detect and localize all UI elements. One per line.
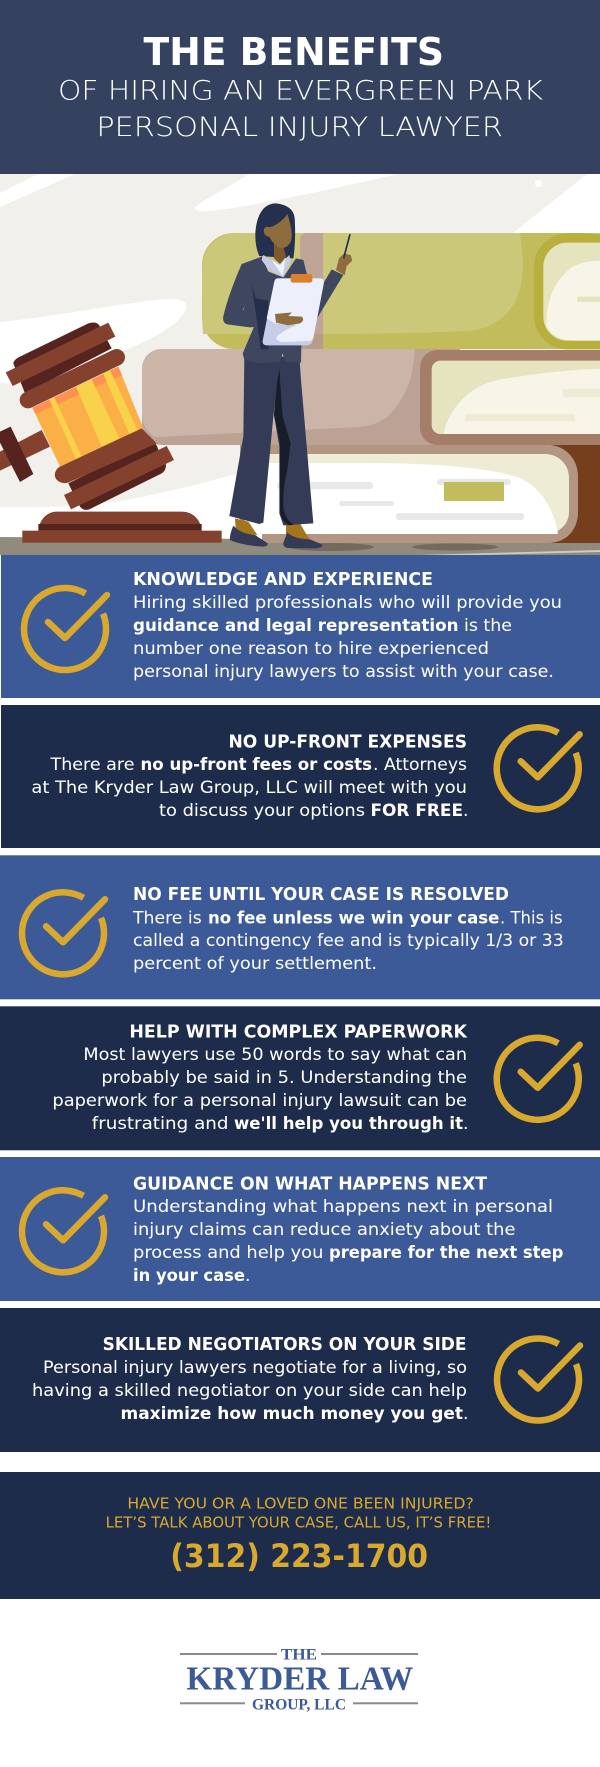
panel heading: HELP WITH COMPLEX PAPERWORK bbox=[129, 1022, 468, 1042]
panel text: . bbox=[463, 801, 468, 821]
panel text: FOR FREE bbox=[370, 801, 463, 821]
panel background bbox=[0, 855, 600, 999]
shirt collar bbox=[262, 255, 291, 277]
cover highlight bbox=[142, 349, 415, 437]
bottom bands bbox=[55, 428, 157, 483]
top dark cap bbox=[13, 323, 112, 393]
top bands bbox=[6, 323, 115, 386]
icon: gavel bbox=[0, 323, 222, 543]
panel heading: GUIDANCE ON WHAT HAPPENS NEXT bbox=[133, 1174, 487, 1194]
panel: guidance on what happens next bbox=[0, 1157, 600, 1301]
back cover bbox=[550, 445, 600, 543]
call to action text: LET’S TALK ABOUT YOUR CASE, CALL US, IT’S FREE! bbox=[106, 1514, 491, 1532]
icon: check circle bbox=[497, 1339, 580, 1421]
panel heading: SKILLED NEGOTIATORS ON YOUR SIDE bbox=[103, 1335, 466, 1355]
header background bbox=[0, 0, 600, 174]
logo text: KRYDER LAW bbox=[186, 1660, 413, 1697]
panel: no up-front expenses bbox=[1, 705, 600, 848]
illustration backdrop bbox=[0, 174, 600, 555]
clipboard sheet highlight bbox=[267, 278, 324, 342]
panel text bbox=[32, 1358, 468, 1424]
panel text bbox=[31, 755, 468, 821]
panel text bbox=[133, 593, 562, 682]
woman lawyer figure bbox=[223, 203, 352, 548]
pages rim bbox=[534, 233, 600, 349]
panel text: There is bbox=[132, 908, 202, 928]
page highlight bbox=[245, 463, 558, 534]
pointer bbox=[340, 234, 350, 272]
panel text: injury claims can reduce anxiety about the bbox=[133, 1220, 516, 1240]
panel background bbox=[1, 555, 600, 698]
book: middle tan bbox=[142, 349, 600, 445]
call to action text bbox=[106, 1495, 491, 1532]
socks bbox=[235, 518, 257, 535]
phone number: (312) 223-1700 bbox=[170, 1537, 428, 1575]
panel: skilled negotiators bbox=[0, 1308, 600, 1452]
shoes bbox=[230, 526, 268, 547]
clipboard clip bbox=[291, 274, 312, 283]
panel text: probably be said in 5. Understanding the bbox=[101, 1068, 467, 1088]
pants right leg bbox=[274, 357, 313, 525]
icon: check circle bbox=[22, 892, 105, 974]
clipboard bbox=[263, 278, 324, 345]
pages bbox=[250, 454, 569, 534]
page highlight bbox=[547, 261, 600, 341]
pants left leg bbox=[229, 357, 280, 524]
panel text: number one reason to hire experienced bbox=[133, 639, 489, 659]
icon: check circle bbox=[497, 727, 580, 809]
panel text: . This is bbox=[500, 908, 563, 928]
panel text: no fee unless we win your case bbox=[208, 908, 499, 928]
logo text bbox=[186, 1646, 413, 1713]
panel text: Hiring skilled professionals who will provide you bbox=[133, 593, 562, 613]
jacket inner shadow bbox=[252, 285, 268, 349]
icon: check circle bbox=[497, 1038, 580, 1120]
title bbox=[58, 30, 543, 143]
panel background bbox=[1, 705, 600, 848]
text line bbox=[577, 297, 600, 302]
panel text: . bbox=[463, 1114, 468, 1134]
book: bottom bbox=[240, 445, 600, 543]
text lines bbox=[277, 479, 524, 520]
title: THE BENEFITS bbox=[144, 30, 444, 74]
sound block bbox=[38, 512, 202, 531]
green label bbox=[444, 482, 504, 501]
panel: no fee until resolved bbox=[0, 855, 600, 999]
pages bbox=[543, 243, 600, 341]
panel text bbox=[133, 1197, 563, 1286]
panel: knowledge and experience bbox=[1, 555, 600, 698]
logo text: GROUP, LLC bbox=[252, 1696, 346, 1713]
pages bbox=[432, 361, 600, 434]
panel background bbox=[0, 1157, 600, 1301]
panel text: There are bbox=[49, 755, 134, 775]
hair bbox=[255, 203, 295, 258]
panel background bbox=[0, 1006, 600, 1150]
handle end bbox=[0, 427, 33, 482]
logo: The Kryder Law Group, LLC bbox=[180, 1646, 418, 1713]
panel: complex paperwork bbox=[0, 1006, 600, 1150]
icon: check circle bbox=[22, 1190, 105, 1272]
legs bbox=[229, 357, 322, 548]
header banner bbox=[0, 0, 600, 174]
title: OF HIRING AN EVERGREEN PARK bbox=[58, 76, 543, 106]
jacket sleeve left bbox=[223, 264, 275, 327]
panel text: Personal injury lawyers negotiate for a living, so bbox=[43, 1358, 467, 1378]
ground highlight bbox=[420, 550, 600, 555]
white background swooshes bbox=[0, 174, 600, 540]
text lines bbox=[563, 389, 600, 397]
head stripes bbox=[49, 370, 138, 459]
panel text: frustrating and bbox=[92, 1114, 228, 1134]
title: PERSONAL INJURY LAWYER bbox=[96, 112, 503, 143]
panel text: . bbox=[245, 1266, 250, 1286]
panel text: in your case bbox=[133, 1266, 245, 1286]
face bbox=[264, 214, 292, 248]
panel heading: NO FEE UNTIL YOUR CASE IS RESOLVED bbox=[133, 885, 509, 905]
panel text: having a skilled negotiator on your side can help bbox=[32, 1381, 467, 1401]
panel text: is the bbox=[464, 616, 512, 636]
head trim bbox=[32, 367, 122, 414]
panel text: Most lawyers use 50 words to say what can bbox=[83, 1045, 467, 1065]
right hand bbox=[336, 253, 352, 275]
book: top green bbox=[202, 233, 600, 349]
upper body bbox=[223, 203, 352, 363]
illustration: lawyer with books and gavel bbox=[0, 174, 600, 555]
cover bbox=[142, 349, 462, 445]
neck bbox=[274, 242, 286, 264]
bottom dark cap bbox=[68, 442, 166, 510]
panel text: called a contingency fee and is typically 1/3 or 33 bbox=[133, 931, 564, 951]
panel text: at The Kryder Law Group, LLC will meet with you bbox=[31, 778, 467, 798]
panel text: paperwork for a personal injury lawsuit can be bbox=[52, 1091, 467, 1111]
left hand bbox=[275, 312, 303, 325]
ground shadows bbox=[288, 543, 498, 551]
panel text: guidance and legal representation bbox=[133, 616, 458, 636]
panel heading: KNOWLEDGE AND EXPERIENCE bbox=[133, 570, 433, 590]
panel text: maximize how much money you get bbox=[120, 1404, 463, 1424]
rim bbox=[240, 445, 578, 543]
spine strip bbox=[300, 233, 323, 349]
panel text bbox=[52, 1045, 468, 1134]
panel text: we'll help you through it bbox=[234, 1114, 463, 1134]
icon: check circle bbox=[24, 588, 107, 670]
pages rim bbox=[420, 350, 600, 445]
panel text: prepare for the next step bbox=[329, 1243, 563, 1263]
logo rules bbox=[180, 1653, 418, 1704]
call to action text: HAVE YOU OR A LOVED ONE BEEN INJURED? bbox=[127, 1495, 474, 1513]
panel text: Understanding what happens next in personal bbox=[133, 1197, 553, 1217]
shirt bbox=[272, 259, 285, 276]
panel text: to discuss your options bbox=[159, 801, 365, 821]
gavel handle bbox=[0, 430, 50, 471]
panel text: process and help you bbox=[133, 1243, 323, 1263]
panel text: . bbox=[463, 1404, 468, 1424]
panel text: personal injury lawyers to assist with your case. bbox=[133, 662, 554, 682]
panel background bbox=[0, 1308, 600, 1452]
panel text: no up-front fees or costs bbox=[140, 755, 372, 775]
banner background bbox=[0, 1472, 600, 1599]
panel heading: NO UP-FRONT EXPENSES bbox=[228, 732, 467, 752]
cover highlight bbox=[202, 233, 523, 334]
panel text: . Attorneys bbox=[373, 755, 467, 775]
ground bbox=[0, 537, 600, 555]
gavel head body bbox=[32, 367, 143, 467]
logo text: THE bbox=[281, 1646, 317, 1663]
panel text bbox=[132, 908, 564, 974]
jacket bbox=[242, 257, 307, 363]
call to action banner bbox=[0, 1472, 600, 1599]
pants shadow bbox=[274, 368, 294, 525]
page highlight bbox=[443, 369, 600, 434]
cover bbox=[202, 233, 600, 349]
jacket right sleeve bbox=[316, 269, 343, 320]
panel text: percent of your settlement. bbox=[133, 954, 377, 974]
